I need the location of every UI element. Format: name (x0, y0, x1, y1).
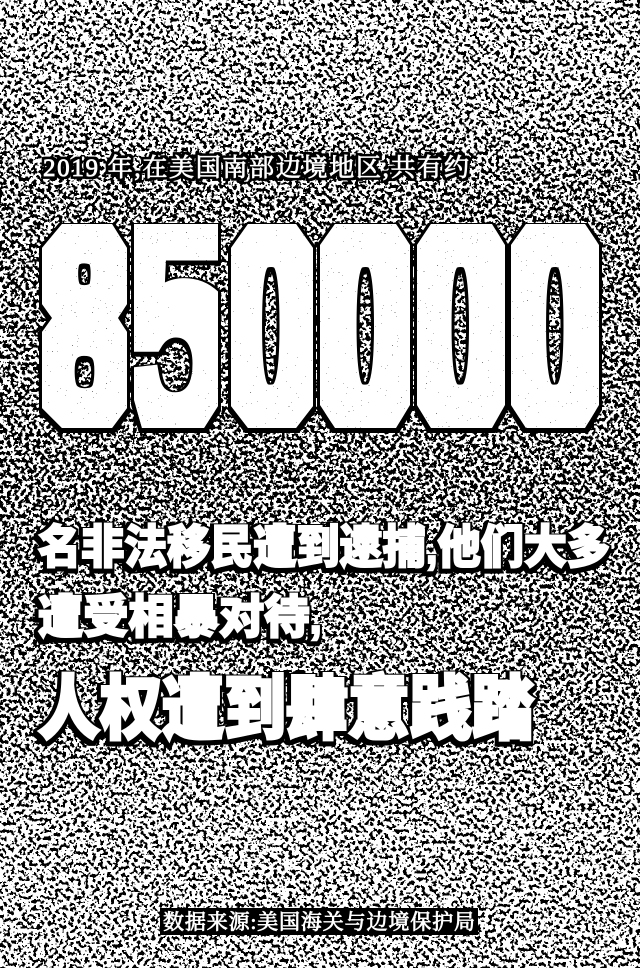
source note: 数据来源:美国海关与边境保护局 (163, 910, 475, 934)
digit 0 second: 0 (301, 148, 430, 505)
digit 0 fourth: 0 (491, 148, 619, 505)
headline: human rights: 人权遭到肆意践踏 (38, 670, 534, 748)
statement line one: 名非法移民遭到逮捕,他们大多 (38, 521, 610, 573)
statement line two: 遭受相暴对待, (38, 591, 322, 643)
digit 8: 8 (20, 148, 149, 505)
digit 0 first: 0 (207, 148, 335, 505)
digit 5: 5 (112, 148, 240, 505)
fine black specks on the number (38, 220, 604, 432)
big number 850000 (39, 223, 602, 433)
digit 0 third: 0 (396, 148, 525, 505)
intro text line: 2019 年,在美国南部边境地区,共有约 (43, 154, 469, 182)
